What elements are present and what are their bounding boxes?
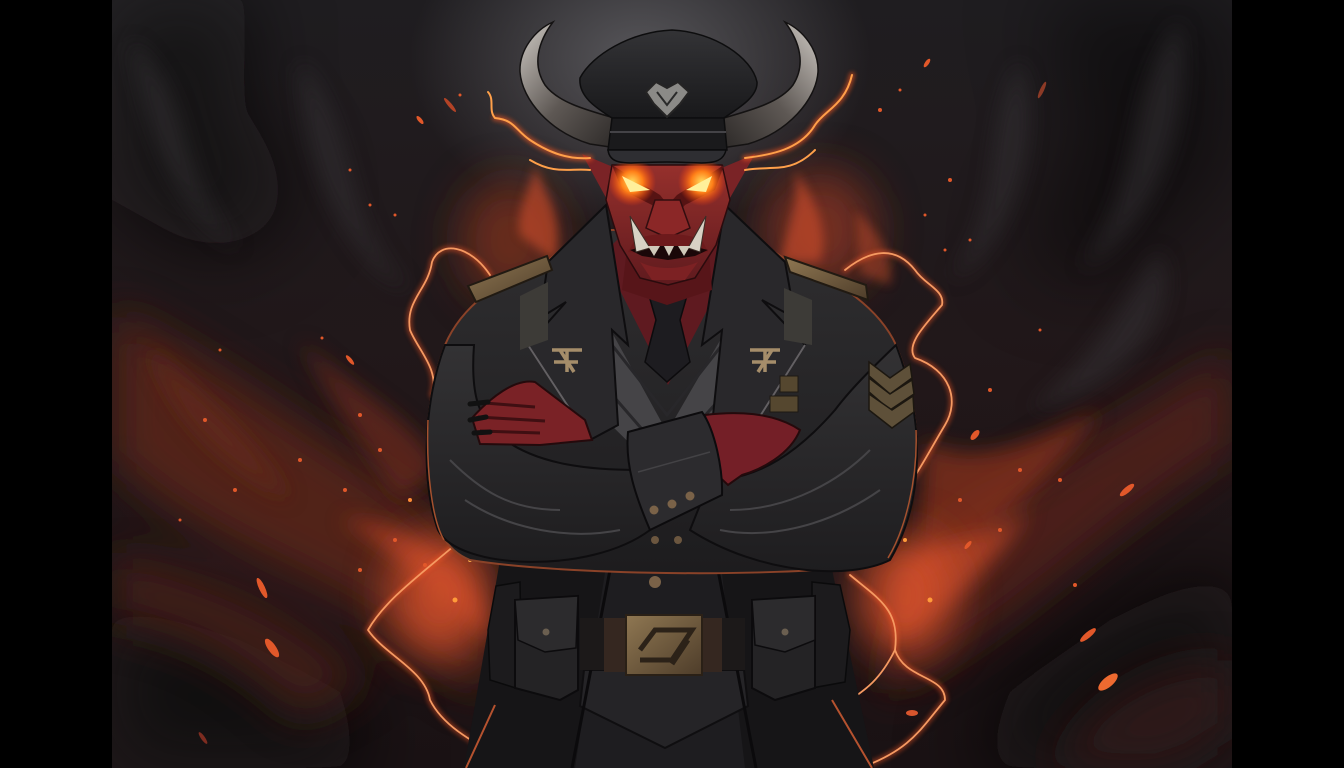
rank chevrons xyxy=(869,362,914,428)
cuff xyxy=(627,412,722,530)
embers xyxy=(178,58,1136,745)
brow xyxy=(612,165,724,225)
nose xyxy=(646,200,690,238)
horns xyxy=(520,22,818,150)
waistcoat xyxy=(604,318,733,480)
left sleeve xyxy=(427,345,650,562)
ears xyxy=(582,154,625,205)
pouches xyxy=(488,582,850,700)
tusks xyxy=(630,216,650,252)
shoulder straps xyxy=(468,256,868,350)
pocket tabs xyxy=(770,376,798,412)
red hand left xyxy=(470,381,592,445)
facial flames xyxy=(488,75,852,170)
mouth xyxy=(628,234,708,256)
face xyxy=(606,165,730,285)
collar and lapels xyxy=(528,205,805,440)
necktie xyxy=(645,292,690,382)
bright halo behind shoulders and hips xyxy=(390,170,953,657)
red flame glow left and right xyxy=(112,310,1232,768)
red hand right xyxy=(705,413,800,485)
neck xyxy=(622,240,712,305)
chin xyxy=(640,262,698,280)
grey smoke wisps xyxy=(130,20,1184,410)
officer cap xyxy=(580,30,757,163)
right sleeve xyxy=(690,345,917,571)
figure: demon officer xyxy=(427,22,917,768)
lightning tendrils xyxy=(368,248,952,768)
crossed arms xyxy=(427,345,917,588)
head xyxy=(582,154,755,305)
torso and shoulders xyxy=(427,230,917,573)
eyes glow xyxy=(608,158,656,206)
coat front lower xyxy=(575,540,745,768)
belt and buckle xyxy=(580,615,745,675)
top light haze xyxy=(440,0,839,206)
lapel insignia xyxy=(552,350,780,372)
coat skirt and lower body xyxy=(464,560,874,768)
red shirt xyxy=(602,235,736,385)
